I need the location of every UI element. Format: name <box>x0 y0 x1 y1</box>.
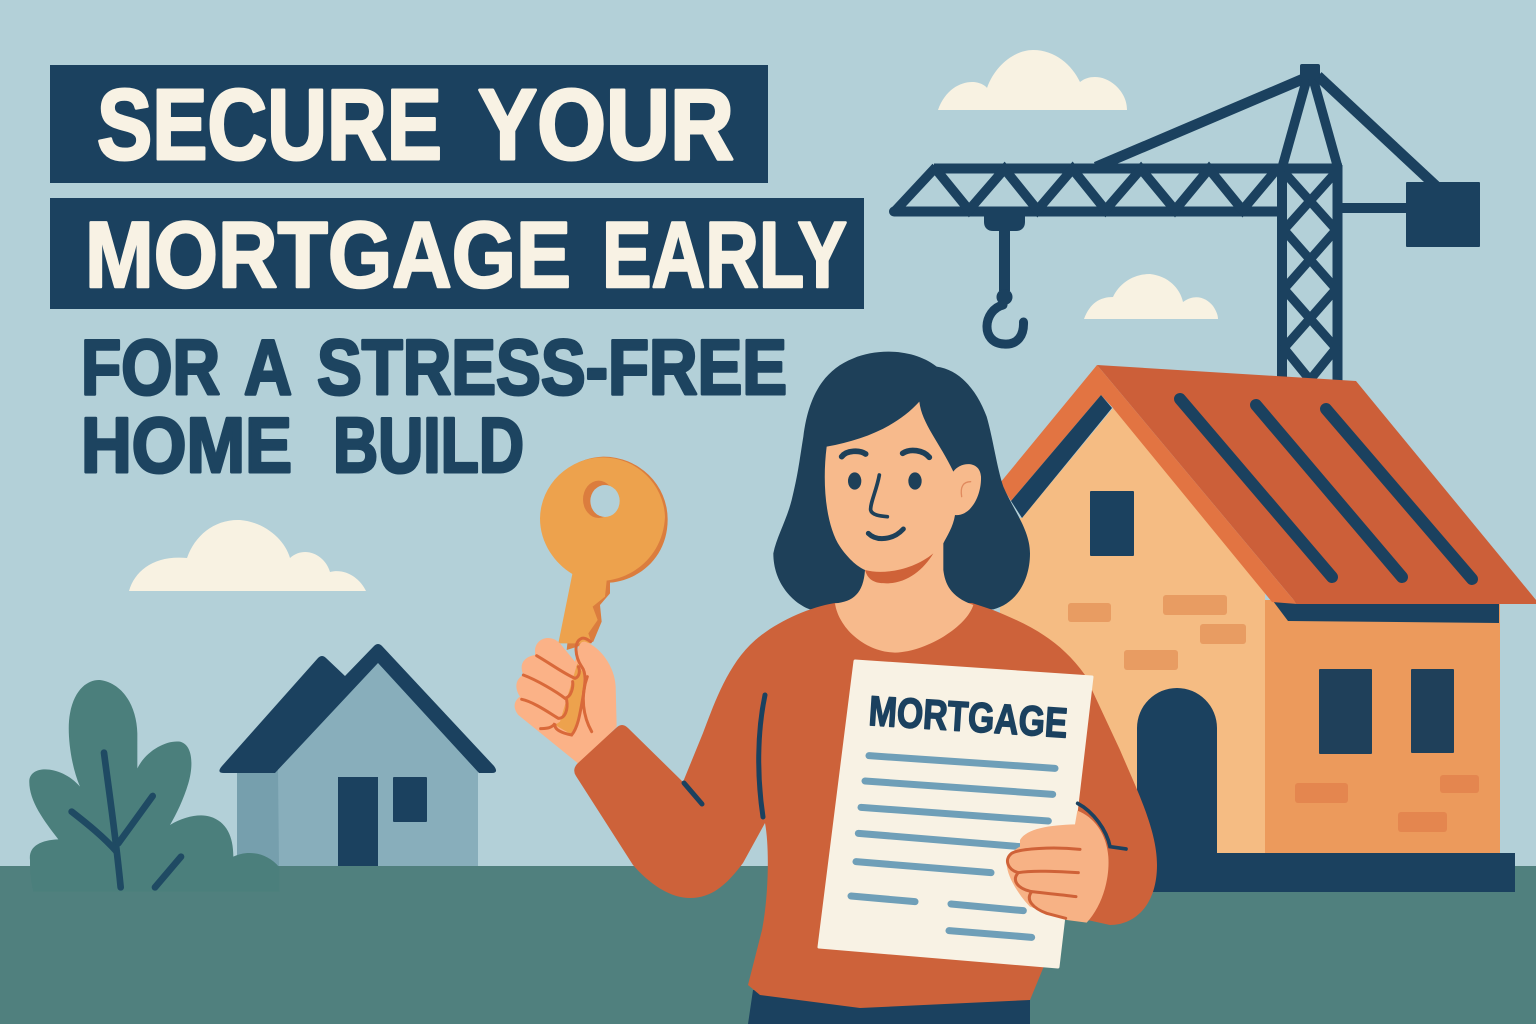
woman holding key and mortgage document <box>515 352 1157 1024</box>
shrub <box>29 680 279 892</box>
roof plane <box>1097 365 1536 604</box>
small house side wall <box>237 770 280 866</box>
ear detail <box>961 482 971 497</box>
small house door <box>338 777 378 866</box>
subtitle line 2 <box>81 401 524 489</box>
house front wall <box>1000 408 1265 853</box>
subtitle line 2: BUILD <box>333 401 524 489</box>
hair <box>773 352 1030 609</box>
raised hand <box>515 638 617 765</box>
front wall bricks <box>1068 595 1246 670</box>
title banner line 1 <box>50 65 768 183</box>
shrub branches <box>72 753 181 887</box>
document text lines <box>851 756 1055 937</box>
roof lines <box>1180 399 1472 579</box>
house side wall <box>1265 600 1500 853</box>
crane tower <box>1282 165 1338 382</box>
title banner line 2: MORTGAGE <box>85 202 571 307</box>
large house <box>1000 365 1536 892</box>
ground <box>0 866 1536 1024</box>
crane hook <box>984 216 1025 344</box>
title banner line 2: EARLY <box>602 202 847 307</box>
subtitle line 1 <box>81 323 787 411</box>
nose <box>871 475 887 517</box>
cloud: under crane <box>1084 274 1218 319</box>
title banner line 2 <box>50 198 864 309</box>
key shadow <box>542 457 668 650</box>
cloud: top right <box>938 50 1127 110</box>
jaw shadow <box>865 553 933 583</box>
gable trim <box>1000 365 1297 604</box>
title banner line 1: YOUR <box>478 69 734 181</box>
eyes <box>848 472 922 490</box>
eyebrows <box>842 450 929 457</box>
gable shadow <box>1011 395 1112 518</box>
crane jib truss <box>894 167 1342 212</box>
subtitle line 2: HOME <box>81 401 292 489</box>
title block <box>50 65 864 489</box>
upper window <box>1090 491 1134 556</box>
hand holding document <box>1007 803 1126 923</box>
key hole <box>583 481 614 518</box>
sleeve creases <box>684 695 765 817</box>
key body <box>540 457 665 643</box>
small house roof <box>219 644 496 773</box>
sweater <box>574 603 1157 1008</box>
subtitle line 1: A <box>244 323 292 411</box>
small house front wall <box>278 660 478 866</box>
title banner line 1: SECURE <box>97 69 442 181</box>
key in grip <box>555 663 583 734</box>
small house <box>219 644 496 866</box>
arched door and foundation <box>1137 688 1515 892</box>
crane counterweight <box>1342 182 1480 247</box>
key <box>540 457 668 650</box>
small house window <box>393 777 427 822</box>
document heading: MORTGAGE <box>867 687 1069 746</box>
smile <box>868 529 903 539</box>
cloud: left <box>129 520 366 591</box>
side wall windows <box>1319 669 1454 754</box>
side wall bricks <box>1295 775 1479 832</box>
paper sheet <box>819 661 1092 967</box>
trousers <box>748 990 1030 1024</box>
subtitle line 1: STRESS-FREE <box>317 323 787 411</box>
eave shadow <box>1273 601 1499 623</box>
finger outlines <box>522 638 592 735</box>
face and neck <box>825 402 981 653</box>
mortgage document <box>819 661 1092 967</box>
finger outlines <box>1007 848 1080 918</box>
crane <box>894 64 1480 382</box>
crane ties and mast head <box>1096 64 1436 186</box>
subtitle line 1: FOR <box>81 323 220 411</box>
